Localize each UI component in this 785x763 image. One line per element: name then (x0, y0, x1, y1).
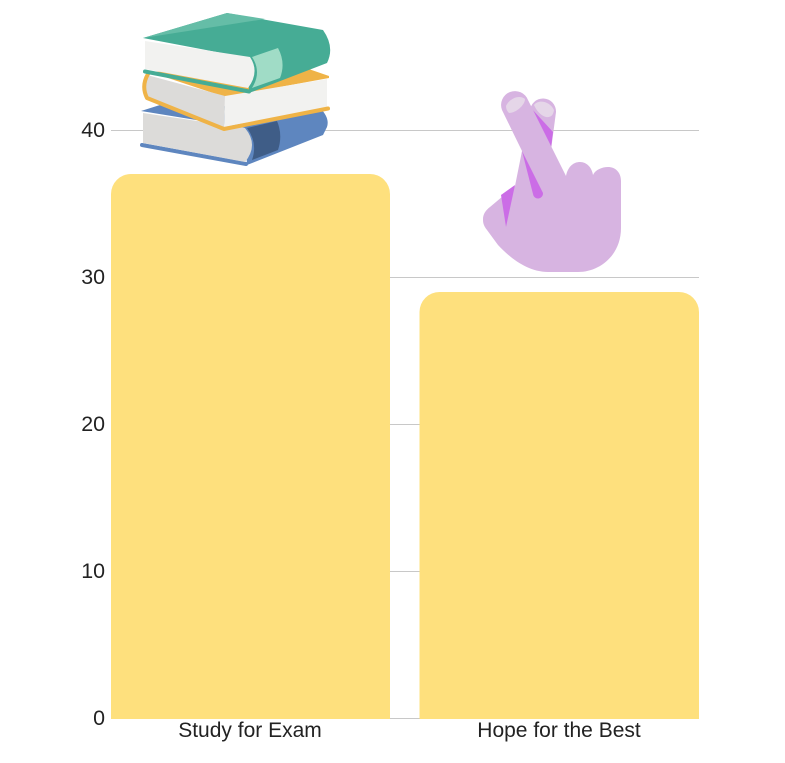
palm and front finger (483, 91, 621, 272)
y axis labels: 30 (81, 265, 105, 289)
y axis labels: 10 (81, 559, 105, 583)
bar: Study for Exam (111, 174, 390, 719)
bar: Hope for the Best (420, 292, 699, 719)
back nail (534, 102, 554, 117)
x axis labels (178, 719, 641, 742)
x axis labels: Hope for the Best (477, 719, 641, 742)
orange book (144, 66, 329, 129)
finger shadow (531, 108, 553, 148)
icon: crossed fingers hand (483, 91, 621, 272)
y axis labels (81, 118, 105, 730)
y axis labels: 0 (93, 706, 105, 730)
back finger (530, 98, 556, 190)
green book (143, 13, 330, 93)
x axis labels: Study for Exam (178, 719, 322, 742)
y axis labels: 40 (81, 118, 105, 142)
icon: stack of books (141, 13, 330, 165)
y axis labels: 20 (81, 412, 105, 436)
front nail (506, 97, 525, 113)
crease (522, 151, 543, 199)
blue book (141, 105, 328, 165)
thumb shadow (501, 185, 515, 227)
